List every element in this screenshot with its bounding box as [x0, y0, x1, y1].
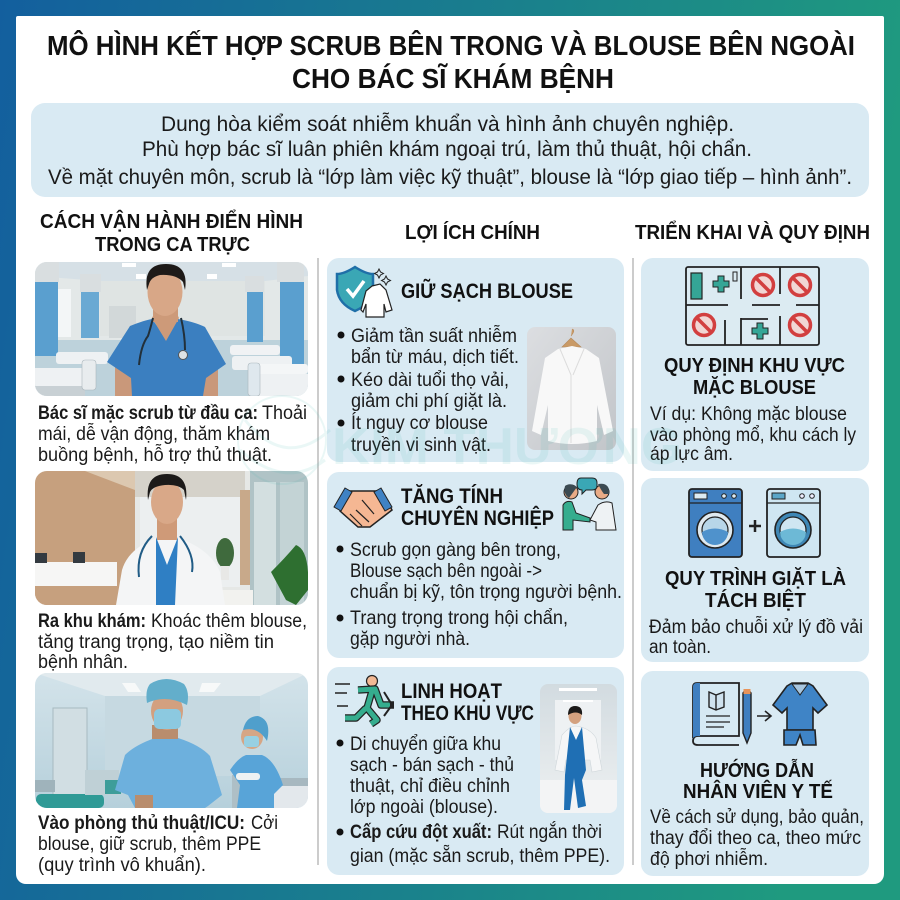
heading: professionalism: TĂNG TÍNH: [401, 485, 503, 508]
panel: blouse zone rules: [641, 258, 869, 471]
intro panel: Về mặt chuyên môn, scrub là “lớp làm việc kỹ thuật”, blouse là “lớp giao tiếp – hình ảnh”.: [48, 166, 852, 189]
bullet list: professionalism: [336, 540, 622, 650]
caption: entering ICU: Cởi: [251, 813, 278, 834]
heading: professionalism: CHUYÊN NGHIỆP: [401, 506, 554, 530]
panel: staff guidance: [641, 671, 869, 876]
heading: flexibility: THEO KHU VỰC: [401, 702, 534, 725]
intro panel: [31, 103, 869, 197]
heading: keep blouse clean: GIỮ SẠCH BLOUSE: [401, 279, 573, 303]
caption: entering ICU: blouse, giữ scrub, thêm PPE: [38, 834, 261, 855]
bullet list: flexibility: lớp ngoài (blouse).: [350, 797, 498, 818]
heading: professionalism: [401, 485, 554, 530]
watermark logo: KIM THƯƠNG: [332, 418, 682, 476]
caption: going to clinic: [38, 611, 307, 673]
text: staff guidance: Về cách sử dụng, bảo quản,: [650, 807, 864, 828]
caption: scrub from start of shift: Bác sĩ mặc scrub từ đầu ca:: [38, 403, 258, 424]
text: laundry: [649, 616, 863, 658]
icon: shield and coat: [337, 267, 392, 317]
title: CHO BÁC SĨ KHÁM BỆNH: [292, 63, 614, 94]
caption: going to clinic: Ra khu khám:: [38, 611, 146, 632]
bullet list: professionalism: Scrub gọn gàng bên trong,: [350, 540, 561, 561]
title: [47, 29, 855, 94]
bullet list: flexibility: Rút ngắn thời: [497, 821, 602, 843]
bullet list: keep blouse clean: bẩn từ máu, dịch tiết.: [351, 347, 519, 368]
text: staff guidance: [650, 807, 864, 870]
panel: flexibility by zone: [327, 667, 624, 875]
text: blouse zones: Ví dụ: Không mặc blouse: [650, 404, 847, 425]
text: blouse zones: áp lực âm.: [650, 444, 733, 465]
caption: scrub from start of shift: mái, dễ vận động, thăm khám: [38, 423, 270, 445]
bullet list: flexibility: gian (mặc sẵn scrub, thêm PPE).: [350, 846, 610, 867]
heading: column 1: [40, 209, 303, 256]
bullet list: professionalism: chuẩn bị kỹ, tôn trọng người bệnh.: [350, 582, 622, 603]
text: blouse zones: [650, 404, 856, 465]
caption: scrub from start of shift: Thoải: [262, 403, 307, 424]
caption: entering ICU: [38, 813, 278, 876]
heading: staff guidance: NHÂN VIÊN Y TẾ: [683, 779, 833, 803]
caption: going to clinic: tăng trang trọng, tạo niềm tin: [38, 632, 274, 653]
icon: manual, pencil, arrow and scrub: [693, 683, 827, 745]
heading: laundry: TÁCH BIỆT: [705, 588, 806, 612]
caption: entering ICU: (quy trình vô khuẩn).: [38, 855, 206, 876]
icon: two washing machines: [689, 489, 820, 557]
title: MÔ HÌNH KẾT HỢP SCRUB BÊN TRONG VÀ BLOUSE BÊN NGOÀI: [47, 29, 855, 61]
bullet list: keep blouse clean: [338, 325, 519, 456]
caption: entering ICU: Vào phòng thủ thuật/ICU:: [38, 813, 245, 834]
photo: doctor in scrubs in ward: [35, 262, 308, 396]
bullet list: flexibility: Cấp cứu đột xuất:: [350, 822, 492, 843]
photo: white shirt on hanger: [527, 327, 616, 450]
watermark logo: [238, 396, 682, 484]
bullet list: professionalism: gặp người nhà.: [350, 629, 470, 650]
icon: running figure with arrow: [335, 676, 394, 724]
photo: staff in procedure room: [35, 673, 308, 808]
bullet list: flexibility: Di chuyển giữa khu: [350, 734, 501, 755]
caption: going to clinic: bệnh nhân.: [38, 652, 128, 673]
heading: flexibility: LINH HOẠT: [401, 680, 502, 703]
caption: going to clinic: Khoác thêm blouse,: [151, 611, 307, 632]
panel: keep blouse clean: [327, 258, 624, 462]
bullet list: flexibility: sạch - bán sạch - thủ: [350, 755, 514, 776]
bullet list: flexibility: thuật, chỉ điều chỉnh: [350, 776, 510, 797]
icon: handshake: [334, 488, 392, 527]
icon: floor plan with prohibited zones: [686, 267, 819, 345]
heading: column 3: TRIỂN KHAI VÀ QUY ĐỊNH: [635, 221, 870, 244]
panel: professionalism: [327, 472, 624, 658]
bullet list: professionalism: Blouse sạch bên ngoài ->: [350, 561, 542, 582]
panel: separate laundry process: [641, 478, 869, 662]
intro panel: Dung hòa kiểm soát nhiễm khuẩn và hình ảnh chuyên nghiệp.: [161, 113, 734, 136]
bullet list: keep blouse clean: Kéo dài tuổi thọ vải,: [351, 370, 509, 391]
bullet list: keep blouse clean: truyền vi sinh vật.: [351, 435, 491, 456]
bullet list: flexibility: [336, 734, 610, 867]
heading: staff guidance: [683, 758, 833, 803]
caption: scrub from start of shift: buồng bệnh, hỗ trợ thủ thuật.: [38, 444, 272, 466]
bullet list: keep blouse clean: Giảm tần suất nhiễm: [351, 325, 517, 347]
heading: blouse zones: QUY ĐỊNH KHU VỰC: [664, 354, 845, 377]
text: staff guidance: độ phơi nhiễm.: [650, 848, 768, 870]
photo: doctor running in corridor: [540, 684, 617, 813]
text: blouse zones: vào phòng mổ, khu cách ly: [650, 425, 856, 446]
text: laundry: an toàn.: [649, 637, 711, 658]
icon: doctor and patient: [563, 478, 616, 530]
bullet list: keep blouse clean: giảm chi phí giặt là.: [351, 391, 507, 412]
heading: column 1: TRONG CA TRỰC: [95, 233, 250, 256]
heading: flexibility: [401, 680, 534, 725]
photo: doctor in blouse at clinic: [35, 471, 308, 605]
text: staff guidance: thay đổi theo ca, theo mức: [650, 828, 861, 849]
caption: scrub from start of shift: [38, 403, 307, 466]
bullet list: keep blouse clean: Ít nguy cơ blouse: [351, 413, 488, 434]
heading: column 2: LỢI ÍCH CHÍNH: [405, 221, 540, 244]
heading: laundry: [665, 567, 846, 612]
heading: laundry: QUY TRÌNH GIẶT LÀ: [665, 567, 846, 590]
intro panel: Phù hợp bác sĩ luân phiên khám ngoại trú, làm thủ thuật, hội chẩn.: [142, 138, 752, 161]
heading: blouse zones: MẶC BLOUSE: [693, 376, 816, 399]
heading: blouse zones: [664, 354, 845, 399]
heading: staff guidance: HƯỚNG DẪN: [700, 758, 814, 782]
text: laundry: Đảm bảo chuỗi xử lý đồ vải: [649, 616, 863, 638]
heading: column 1: CÁCH VẬN HÀNH ĐIỂN HÌNH: [40, 209, 303, 233]
bullet list: professionalism: Trang trọng trong hội chẩn,: [350, 608, 568, 629]
